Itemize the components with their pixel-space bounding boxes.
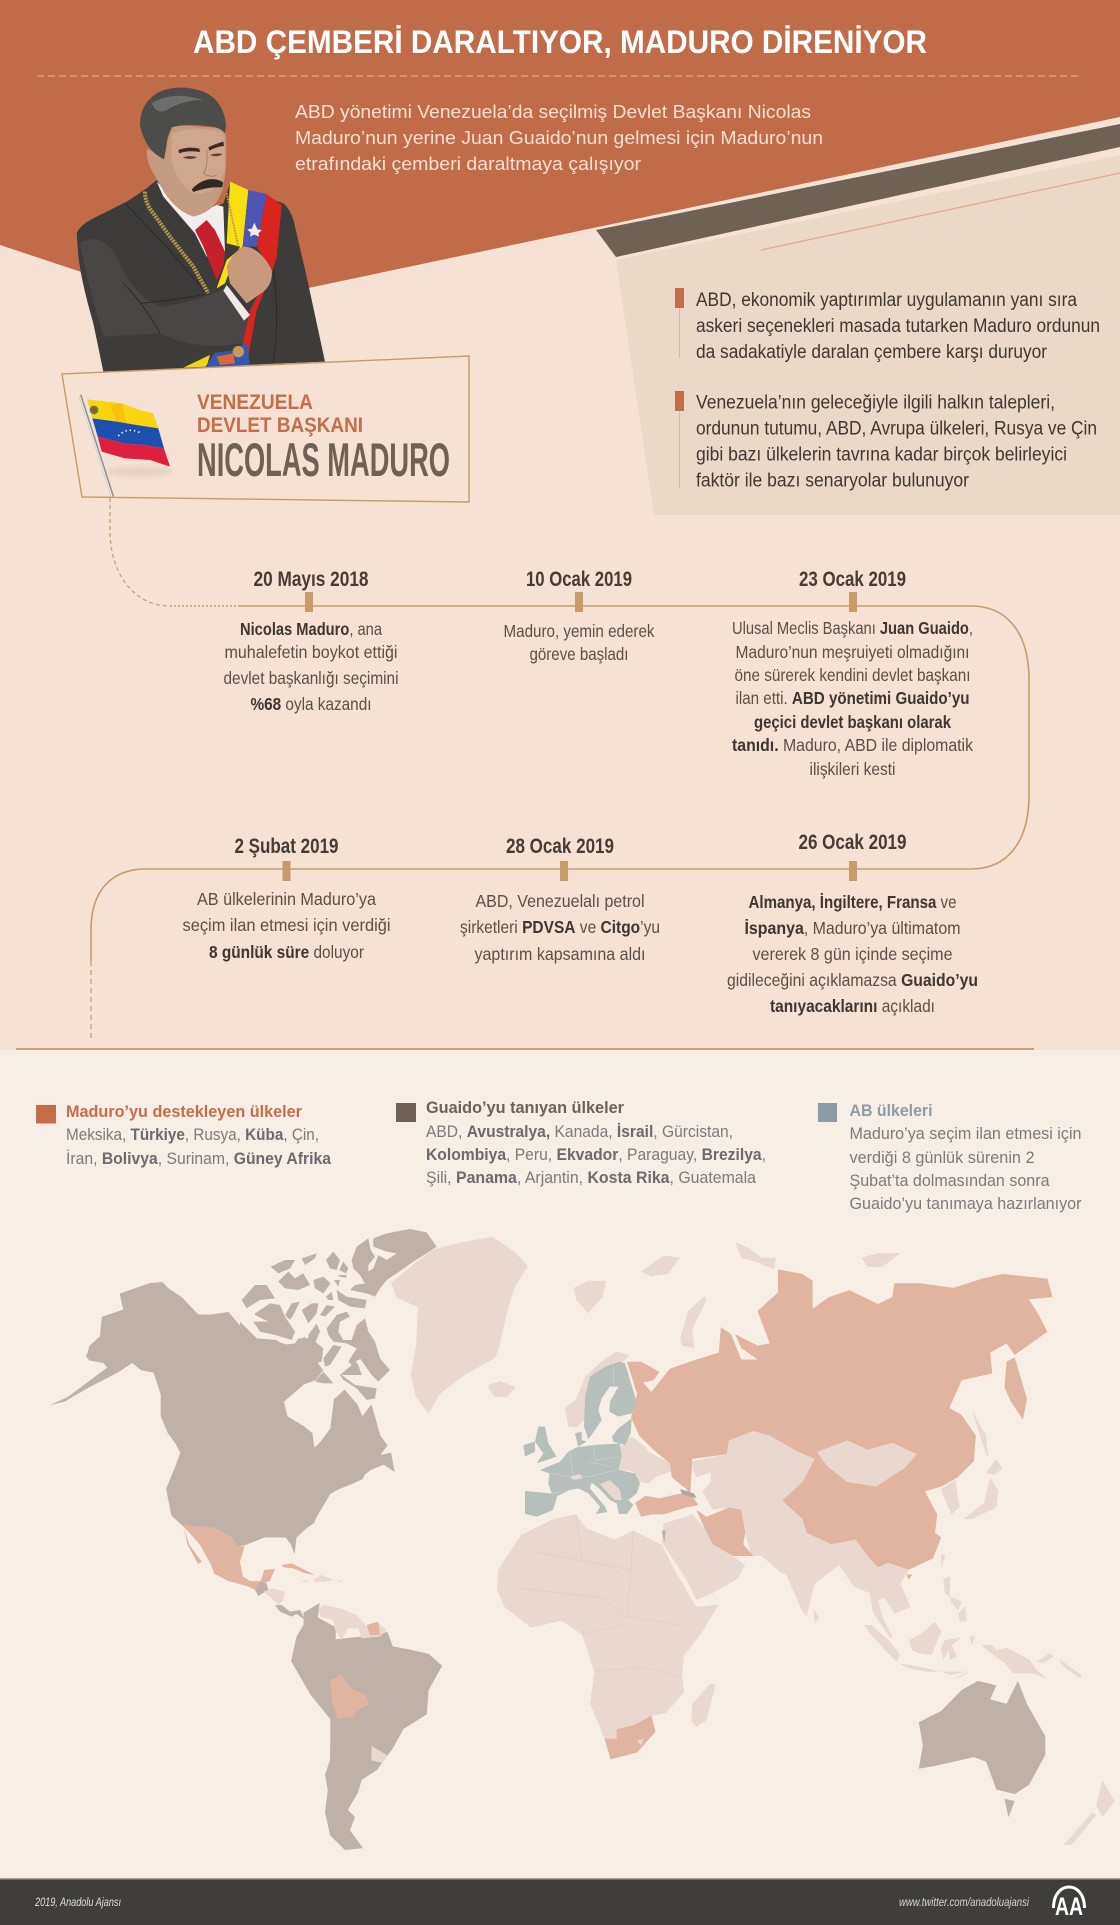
legend: EU countries [818,1101,1082,1213]
timeline event: 23 Ocak 2019: geçici devlet başkanı olarak [754,712,951,732]
icon: Anadolu Agency logo: AA [1055,1893,1083,1921]
South America [291,1603,442,1850]
EU internal borders [549,1365,620,1493]
timeline event: 28 Ocak 2019: yaptırım kapsamına aldı [474,944,646,964]
key point 2: faktör ile bazı senaryolar bulunuyor [696,470,970,492]
intro text: ABD yönetimi Venezuela’da seçilmiş Devlet Başkanı Nicolas [295,101,811,122]
title: ABD ÇEMBERİ DARALTIYOR, MADURO DİRENİYOR [193,24,927,60]
legend: Guaido recognisers: Şili, Panama, Arjantin, Kosta Rika, Guatemala [426,1169,757,1187]
Arctic islands [488,1242,900,1398]
timeline event: 28 Ocak 2019: ABD, Venezuelalı petrol [476,891,644,911]
legend: Guaido recognisers [396,1098,766,1187]
card name: Nicolas Maduro: NICOLAS MADURO [197,433,450,486]
Africa borders [521,1514,684,1704]
legend: Maduro supporters: Meksika, Türkiye, Rusya, Küba, Çin, [66,1126,319,1144]
legend: Maduro supporters: İran, Bolivya, Surinam, Güney Afrika [66,1149,332,1168]
Caribbean islands [301,1575,343,1583]
timeline event: 2 Şubat 2019: 2 Şubat 2019 [234,835,338,858]
timeline event: 23 Ocak 2019: öne sürerek kendini devlet başkanı [734,665,970,685]
Guatemala [255,1582,268,1596]
map: Europe [523,1352,671,1517]
header orange band [0,0,1120,311]
footer link: www.twitter.com/anadoluajansi [899,1897,1029,1909]
key point 2: gibi bazı ülkelerin tavrına kadar birçok belirleyici [696,444,1067,466]
map: Maritime Southeast Asia [864,1577,1082,1679]
timeline event: 26 Ocak 2019: İspanya, Maduro’ya ültimatom [744,918,960,938]
timeline event: 20 Mayıs 2018: Nicolas Maduro, ana [240,619,382,639]
map: Canadian Arctic [240,1229,437,1400]
legend: Guaido recognisers: Kolombiya, Peru, Ekvador, Paraguay, Brezilya, [426,1146,766,1164]
icon: Anadolu Agency logo [1054,1887,1084,1921]
timeline event: 26 Ocak 2019: Almanya, İngiltere, Fransa ve [748,892,957,912]
legend: Guaido recognisers: Guaido’yu tanıyan ülkeler [426,1098,624,1117]
timeline event: 20 Mayıs 2018: %68 oyla kazandı [250,694,372,714]
map: Americas and Greenland [50,1237,528,1850]
timeline event: 26 Ocak 2019: gidileceğini açıklamazsa Guaido’yu [727,970,978,990]
card label: Venezuela devlet başkanı [197,391,363,437]
key point 2 [675,391,1097,492]
Central and South Asia [692,1431,911,1638]
Israel [662,1531,666,1543]
timeline event: 10 Ocak 2019 [504,568,655,664]
timeline event: 23 Ocak 2019: Ulusal Meclis Başkanı Juan Guaido, [732,618,973,638]
key point 2: Venezuela’nın geleceğiyle ilgili halkın talepleri, [696,392,1055,414]
world map [50,1229,1115,1850]
key point 1: da sadakatiyle daralan çembere karşı duruyor [696,342,1048,363]
Georgia [680,1489,696,1498]
footer bar [0,1878,1120,1925]
timeline event: 23 Ocak 2019: ilan etti. ABD yönetimi Guaido’yu [736,688,970,708]
timeline event: 2 Şubat 2019: seçim ilan etmesi için verdiği [182,915,390,935]
Iran [696,1507,753,1556]
portrait: Nicolas Maduro [77,87,325,372]
Cuba [282,1563,315,1575]
timeline event: 23 Ocak 2019 [732,568,973,779]
timeline event: 10 Ocak 2019: 10 Ocak 2019 [526,568,632,591]
timeline event: 26 Ocak 2019: 26 Ocak 2019 [798,831,906,854]
timeline event: 20 Mayıs 2018: 20 Mayıs 2018 [254,568,369,591]
card label: Venezuela devlet başkanı: DEVLET BAŞKANI [197,414,363,437]
card label: Venezuela devlet başkanı: VENEZUELA [197,391,313,414]
background: map section [0,1050,1120,1880]
Venezuela and Guyanas [318,1605,387,1640]
Madagascar [691,1683,716,1727]
Norway [565,1352,629,1427]
timeline event: 23 Ocak 2019: Maduro’nun meşruiyeti olmadığını [736,642,970,662]
legend: EU countries: Maduro’ya seçim ilan etmesi için [850,1125,1082,1143]
timeline event: 20 Mayıs 2018: muhalefetin boykot ettiği [224,642,398,662]
timeline event: 28 Ocak 2019: şirketleri PDVSA ve Citgo’yu [460,917,660,937]
legend: Guaido recognisers: ABD, Avustralya, Kanada, İsrail, Gürcistan, [426,1123,733,1141]
Japan, Korea and nearby islands [814,1410,1115,1845]
timeline event: 20 Mayıs 2018: devlet başkanlığı seçimini [224,668,398,688]
timeline event: 2 Şubat 2019: AB ülkelerinin Maduro’ya [197,889,376,909]
EU member states [523,1362,640,1517]
timeline event: 10 Ocak 2019: göreve başladı [530,644,628,664]
legend: Maduro supporters [36,1102,332,1168]
legend: EU countries: AB ülkeleri [850,1101,932,1120]
diagonal dark band [596,124,1120,257]
Russia and China [627,1269,1053,1570]
timeline event: 26 Ocak 2019: tanıyacaklarını açıkladı [770,996,935,1016]
Bolivia [330,1675,370,1719]
panel: right key points background [616,155,1120,515]
Turkey [635,1494,698,1517]
legend: Maduro supporters: Maduro’yu destekleyen ülkeler [66,1102,302,1121]
timeline event: 10 Ocak 2019: Maduro, yemin ederek [504,621,655,641]
panel: name card [62,356,469,502]
timeline event: 23 Ocak 2019: 23 Ocak 2019 [799,568,906,591]
intro text [295,101,823,174]
Uruguay [371,1746,387,1763]
Africa [497,1514,719,1739]
Suriname [367,1622,380,1635]
map: Africa, Asia, Oceania [488,1242,1115,1845]
Mexico and Yucatan [182,1525,275,1591]
timeline event: 26 Ocak 2019 [727,831,978,1016]
Greenland and Iceland [391,1237,528,1414]
footer credit: 2019, Anadolu Ajansı [34,1897,121,1909]
Costa Rica and Panama [275,1605,305,1620]
Mongolia [817,1440,917,1487]
timeline event: 20 Mayıs 2018 [224,568,398,714]
Arabian Peninsula [662,1514,745,1600]
key point 1: ABD, ekonomik yaptırımlar uygulamanın yanı sıra [696,290,1077,311]
section divider [16,1048,1034,1050]
legend: EU countries: verdiği 8 günlük sürenin 2 [850,1149,1034,1167]
timeline event: 23 Ocak 2019: tanıdı. Maduro, ABD ile diplomatik [732,735,973,755]
timeline event: 23 Ocak 2019: ilişkileri kesti [810,759,896,779]
header dashed divider [37,75,1080,77]
Australia [919,1681,1045,1817]
legend: EU countries: Guaido’yu tanımaya hazırlanıyor [850,1195,1082,1213]
timeline event: 28 Ocak 2019: 28 Ocak 2019 [506,835,614,858]
timeline event: 26 Ocak 2019: vererek 8 gün içinde seçime [752,944,952,964]
timeline event: 2 Şubat 2019: 8 günlük süre doluyor [209,942,364,962]
background: upper section [0,0,1120,1050]
key point 1 [675,288,1100,363]
Balkans [600,1480,622,1500]
intro text: Maduro’nun yerine Juan Guaido’nun gelmesi için Maduro’nun [295,127,823,148]
legend: EU countries: Şubat’ta dolmasından sonra [850,1172,1050,1190]
map: Caribbean and Central America [255,1563,387,1640]
North America: Canada and USA [50,1282,395,1554]
intro text: etrafındaki çemberi daraltmaya çalışıyor [295,153,641,174]
icon: Venezuelan flag [79,395,173,497]
South Africa [604,1715,656,1759]
Ukraine and Belarus [618,1436,671,1483]
timeline event: 28 Ocak 2019 [460,835,660,964]
timeline connector [91,498,1029,1042]
diagonal accent line [761,173,1120,250]
timeline event: 2 Şubat 2019 [182,835,390,962]
Switzerland [570,1474,583,1480]
Honduras and Nicaragua [263,1588,285,1605]
